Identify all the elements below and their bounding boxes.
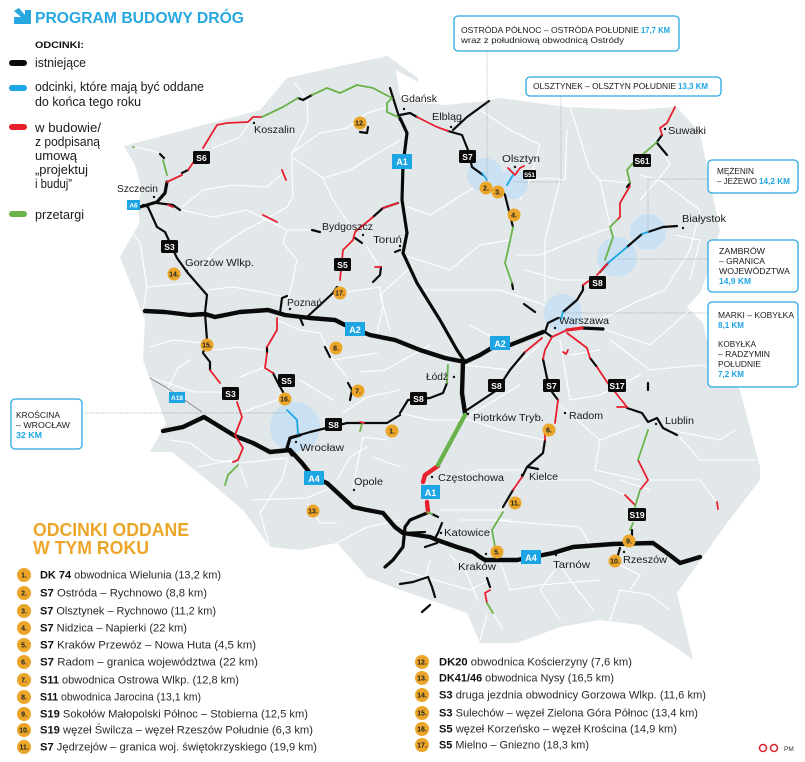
legend item: under construction: i buduj”	[35, 177, 72, 191]
callout: Zambrów: – GRANICA	[719, 256, 765, 266]
expressway labels: black: S8	[413, 394, 424, 404]
callout leader lines	[85, 51, 708, 413]
list: sections 12-17	[415, 655, 706, 752]
expressway labels: black: S7	[546, 381, 557, 391]
expressway labels: black: S7	[462, 152, 473, 162]
callout: Zambrów: WOJEWÓDZTWA	[719, 266, 790, 276]
list: sections 1-11	[17, 568, 317, 754]
callout: Ostróda: 17,7 KM	[641, 25, 670, 35]
callout: Zambrów: ZAMBRÓW	[719, 246, 765, 256]
numbered section markers	[168, 116, 636, 568]
city names: Częstochowa	[438, 472, 504, 484]
numbered section markers: 10.	[610, 558, 620, 566]
publisher mark	[760, 744, 794, 753]
list: sections 12-17: 16.	[417, 726, 427, 734]
callout: Krościna: 32 KM	[16, 430, 42, 440]
city names: Olsztyn	[502, 153, 540, 165]
callout: Mężenin: – JEŻEWO	[717, 176, 757, 186]
list: sections 12-17: 14.	[417, 692, 427, 700]
callout: Marki, Kobyłka	[708, 302, 798, 387]
callout: Zambrów: 14,9 KM	[719, 276, 751, 286]
expressway labels: black: S61	[634, 156, 650, 166]
city names: Radom	[569, 410, 603, 422]
city names: Szczecin	[117, 183, 158, 195]
list: sections 1-11: S11 obwodnica Jarocina (13,1 km)	[40, 692, 201, 704]
list: sections 1-11: 6.	[21, 660, 27, 666]
city names: Warszawa	[559, 315, 609, 327]
city names: Kielce	[529, 471, 558, 483]
numbered section markers: 6.	[546, 428, 552, 434]
list: sections 1-11: S19 Sokołów Małopolski Północ – Stobierna (12,5 km)	[40, 708, 308, 720]
title: PROGRAM BUDOWY DRÓG	[35, 9, 244, 27]
legend item: under construction: z podpisaną	[35, 135, 100, 149]
numbered section markers: 17.	[335, 290, 345, 298]
callout: Marki, Kobyłka: POŁUDNIE	[718, 359, 761, 369]
thin grey border road A18	[150, 378, 202, 412]
list: sections 12-17: DK20 obwodnica Kościerzyny (7,6 km)	[439, 656, 632, 668]
expressway labels: black	[161, 150, 651, 521]
motorway labels: blue: A2	[349, 325, 361, 335]
list: sections 1-11: 9.	[21, 712, 27, 718]
legend item: existing	[9, 56, 86, 70]
city names: Poznań	[287, 297, 322, 309]
list: sections 12-17: DK41/46 obwodnica Nysy (16,5 km)	[439, 672, 614, 684]
expressway labels: black: S17	[609, 381, 625, 391]
legend item: to open this year	[9, 80, 204, 109]
legend item: tenders: przetargi	[35, 208, 84, 222]
numbered section markers: 5.	[494, 550, 500, 556]
callout: Mężenin: MĘŻENIN	[717, 166, 754, 176]
expressway labels: black: S51	[524, 173, 535, 179]
expressway labels: black: S5	[281, 376, 292, 386]
list: sections 12-17: 13.	[417, 676, 427, 682]
motorway labels: blue: A1	[425, 488, 436, 498]
motorway labels: blue	[127, 154, 541, 564]
city names: Bydgoszcz	[322, 221, 373, 233]
callout: Olsztynek: 13,3 KM	[678, 81, 708, 91]
legend: ODCINKI:	[35, 40, 84, 51]
numbered section markers: 1.	[389, 428, 395, 436]
callout: Mężenin: 14,2 KM	[759, 176, 790, 186]
numbered section markers: 12.	[355, 120, 365, 128]
legend item: under construction: w budowie/	[34, 121, 102, 135]
city names: Suwałki	[668, 125, 706, 137]
legend item: under construction	[9, 121, 102, 191]
motorway labels: blue: A1	[396, 157, 408, 167]
list: sections 1-11: DK 74 obwodnica Wielunia (13,2 km)	[40, 570, 221, 582]
list: sections 1-11: 11.	[19, 744, 29, 752]
city names: Katowice	[444, 527, 490, 539]
list: sections 1-11: S7 Ostróda – Rychnowo (8,8 km)	[40, 588, 207, 600]
numbered section markers: 8.	[333, 346, 339, 352]
numbered section markers: 13.	[308, 508, 318, 516]
list: sections 1-11: S7 Radom – granica województwa (22 km)	[40, 656, 258, 668]
list: sections 12-17: 17.	[417, 742, 427, 750]
heading: sections opened this year	[33, 520, 189, 558]
callout: Marki, Kobyłka: 7,2 KM	[718, 369, 744, 379]
legend item: under construction: umową	[35, 149, 77, 163]
expressway labels: black: S8	[328, 420, 339, 430]
list: sections 12-17: S5 węzeł Korzeńsko – węzeł Krościna (14,9 km)	[439, 724, 677, 736]
city names: Lublin	[665, 415, 694, 427]
callout: Ostróda	[454, 16, 679, 51]
callout: Krościna	[11, 399, 82, 449]
callout: Olsztynek	[526, 77, 721, 96]
numbered section markers: 14.	[169, 272, 179, 278]
city names: Wrocław	[300, 442, 344, 454]
legend	[9, 40, 204, 222]
city names: Toruń	[373, 234, 402, 246]
expressway labels: black: S8	[491, 381, 502, 391]
list: sections 1-11: 8.	[21, 694, 27, 702]
callout: Marki, Kobyłka: – RADZYMIN	[718, 349, 770, 359]
city names	[117, 93, 727, 573]
motorway labels: blue: A4	[308, 474, 320, 484]
callout: Marki, Kobyłka: 8,1 KM	[718, 320, 744, 330]
city names: Elbląg	[432, 111, 462, 123]
under construction roads: red	[167, 107, 718, 603]
numbered section markers: 11.	[510, 500, 520, 508]
legend item: existing: istniejące	[35, 56, 86, 70]
existing roads: black	[140, 88, 700, 612]
publisher mark: PM	[784, 746, 794, 753]
city names: Gdańsk	[401, 93, 438, 105]
legend item: under construction: „projektuj	[35, 163, 88, 177]
city names: Gorzów Wlkp.	[185, 257, 254, 269]
highlighted section areas	[270, 158, 666, 452]
city names: Łódź	[426, 371, 448, 383]
list: sections 1-11: S7 Jędrzejów – granica woj. świętokrzyskiego (19,9 km)	[40, 742, 317, 754]
city names: Tarnów	[553, 559, 590, 571]
legend item: to open this year: odcinki, które mają być oddane	[35, 80, 204, 94]
callout: Olsztynek: OLSZTYNEK – OLSZTYN POŁUDNIE	[533, 81, 676, 91]
motorway labels: blue: A18	[171, 395, 183, 402]
list: sections 1-11: S19 węzeł Świlcza – węzeł Rzeszów Południe (6,3 km)	[40, 724, 313, 736]
numbered section markers: 4.	[511, 212, 517, 220]
motorway labels: blue: A2	[494, 339, 506, 349]
callout: Mężenin	[708, 160, 798, 193]
legend item: to open this year: do końca tego roku	[35, 95, 141, 109]
numbered section markers: 16.	[280, 396, 290, 404]
list: sections 12-17: S3 Sulechów – węzeł Zielona Góra Północ (13,4 km)	[439, 708, 698, 720]
city names: Białystok	[682, 213, 727, 225]
list: sections 1-11: 4.	[21, 626, 27, 632]
callout: Krościna: KROŚCINA	[16, 409, 60, 420]
list: sections 1-11: S7 Kraków Przewóz – Nowa Huta (4,5 km)	[40, 640, 256, 652]
city names: Opole	[354, 476, 383, 488]
city names: Kraków	[458, 561, 496, 573]
expressway labels: black: S3	[225, 389, 236, 399]
list: sections 12-17: 15.	[417, 710, 427, 718]
numbered section markers: 9.	[626, 538, 632, 546]
callout: Marki, Kobyłka: KOBYŁKA	[718, 339, 756, 349]
sections to open by end of year: blue	[287, 173, 648, 434]
list: sections 1-11: 2.	[21, 590, 27, 598]
list: sections 1-11: 5.	[21, 642, 27, 650]
callout: Marki, Kobyłka: MARKI – KOBYŁKA	[718, 310, 794, 320]
list: sections 12-17: S3 druga jezdnia obwodnicy Gorzowa Wlkp. (11,6 km)	[439, 690, 706, 702]
motorway labels: blue: A4	[525, 553, 537, 563]
numbered section markers: 3.	[495, 190, 501, 196]
city dots	[153, 108, 684, 556]
map of Poland	[117, 56, 760, 660]
legend item: tenders	[9, 208, 84, 222]
city names: Rzeszów	[623, 554, 667, 566]
list: sections 1-11: 7.	[21, 678, 27, 684]
numbered section markers: 7.	[355, 388, 361, 396]
list: sections 1-11: S7 Nidzica – Napierki (22 km)	[40, 622, 187, 634]
list: sections 12-17: 12.	[417, 660, 427, 666]
list: sections 1-11: 1.	[21, 572, 27, 580]
city names: Piotrków Tryb.	[473, 412, 544, 424]
numbered section markers: 2.	[483, 186, 489, 192]
numbered section markers: 15.	[202, 342, 212, 350]
expressway labels: black: S19	[629, 510, 645, 520]
callout: Krościna: – WROCŁAW	[16, 420, 70, 430]
expressway labels: black: S8	[592, 278, 603, 288]
white regional road network	[130, 83, 755, 640]
icon: blue arrow	[14, 8, 31, 24]
city names: Koszalin	[254, 124, 295, 136]
motorway labels: blue: A6	[129, 202, 138, 210]
callout: Zambrów	[708, 240, 798, 292]
list: sections 1-11: S11 obwodnica Ostrowa Wlkp. (12,8 km)	[40, 674, 239, 686]
heading: sections opened this year: W TYM ROKU	[33, 538, 149, 558]
list: sections 12-17: S5 Mielno – Gniezno (18,3 km)	[439, 740, 589, 752]
list: sections 1-11: S7 Olsztynek – Rychnowo (11,2 km)	[40, 606, 216, 618]
list: sections 1-11: 10.	[19, 728, 29, 734]
expressway labels: black: S5	[337, 260, 348, 270]
callout: Ostróda: OSTRÓDA PÓŁNOC – OSTRÓDA POŁUDNIE	[461, 25, 639, 35]
heading: sections opened this year: ODCINKI ODDANE	[33, 520, 189, 540]
expressway labels: black: S3	[164, 242, 175, 252]
expressway labels: black: S6	[196, 153, 207, 163]
callout: Ostróda: wraz z południową obwodnicą Ostródy	[460, 35, 625, 45]
tenders roads: green	[133, 85, 657, 613]
country shape	[120, 56, 760, 660]
list: sections 1-11: 3.	[21, 608, 27, 616]
